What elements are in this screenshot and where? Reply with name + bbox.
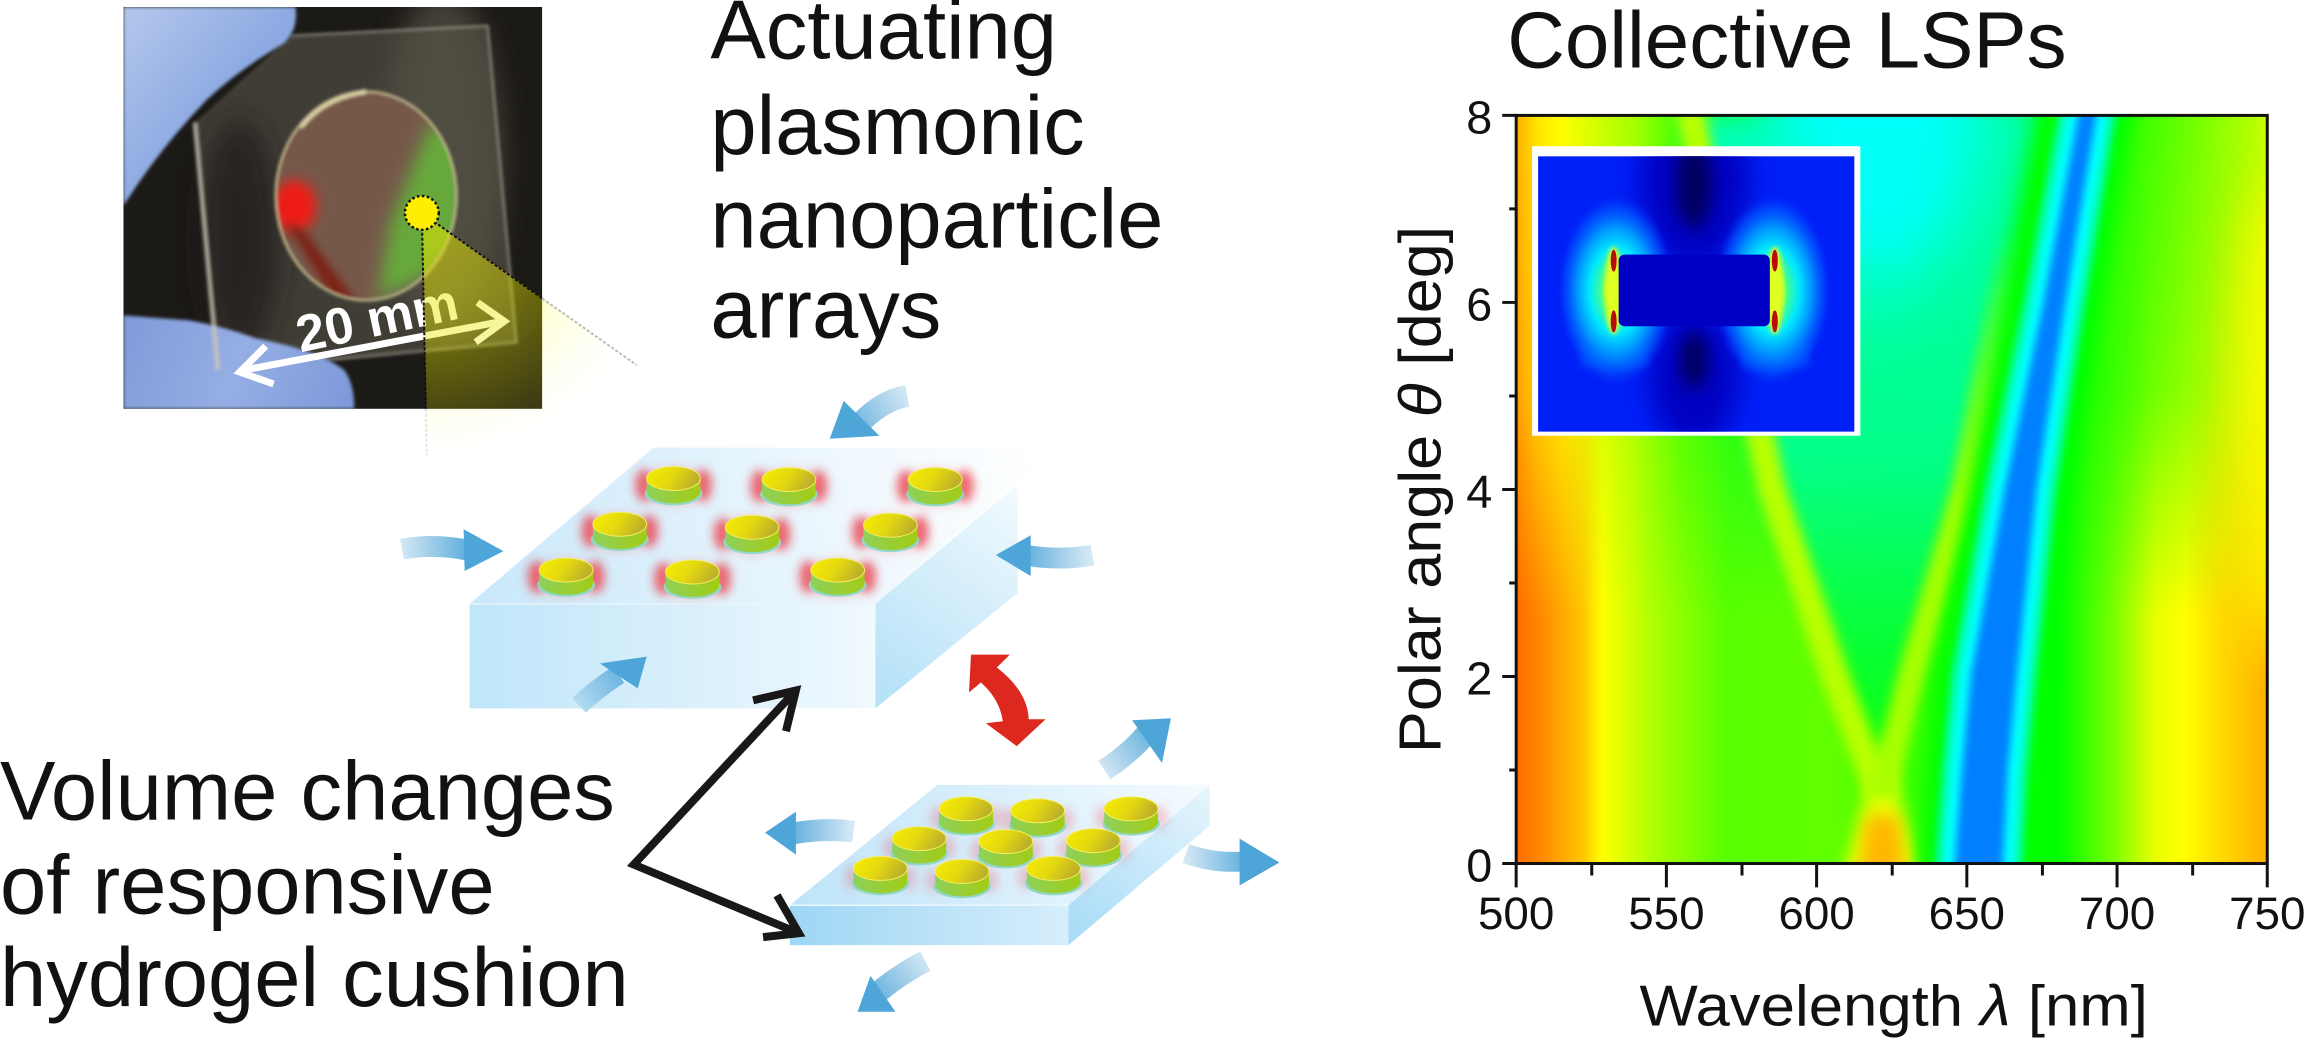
glass slide [195,0,516,370]
blue compress arrow: back [830,396,907,439]
x-axis tick labels: 500 [1478,888,1554,939]
blue compress arrow: right [996,535,1092,576]
cone dotted edges [422,213,637,456]
glass slide left edge [195,122,218,370]
upper glove finger [123,7,296,206]
x-axis tick labels: 700 [2079,888,2155,939]
V left arm [1687,99,1880,796]
black pointer arrows [634,690,799,937]
scale arrow and label: 20 mm [291,272,463,363]
y-axis title: Polar angle θ [deg] [1387,226,1454,753]
x-axis tick labels: 750 [2229,888,2305,939]
heading: volume changes of responsive hydrogel cushion: Volume changes [0,745,615,838]
y-axis tick labels: 8 [1466,91,1492,143]
yellow and orange patch at V apex [1842,736,1920,875]
blue compress arrow: left [402,529,503,571]
red double-headed arrow [969,655,1046,746]
heading: volume changes of responsive hydrogel cushion: of responsive [0,838,495,931]
y-axis tick labels: 6 [1466,278,1492,330]
x-axis tick labels: 550 [1628,888,1705,939]
cyan upper region [1738,116,2002,343]
lower glove fingers [123,315,354,409]
x-axis tick labels: 600 [1778,888,1855,939]
yellow zoom cone inside photo [422,224,542,409]
field hot spots [1611,250,1778,332]
yellow probe spot [405,196,439,230]
yellow mid right edge [2204,175,2266,666]
title: actuating plasmonic nanoparticle arrays: nanoparticle [710,173,1163,266]
heading: volume changes of responsive hydrogel cushion [0,745,629,1024]
x-axis title: Wavelength λ [nm] [1640,975,2148,1039]
blue compress arrow: front [579,657,647,705]
title: actuating plasmonic nanoparticle arrays: plasmonic [710,79,1085,172]
blue expand arrow: front [858,961,925,1012]
collapsed hydrogel block with arrays [790,785,1210,945]
hydrogel disc with diffraction colours [273,92,468,318]
blue expand arrow: back [1104,718,1171,770]
closely spaced nanoparticles [845,797,1167,898]
swollen hydrogel block with arrays [470,448,1057,708]
V interior [1687,99,2039,776]
dispersive collective resonance band [1954,86,2101,895]
title: actuating plasmonic nanoparticle arrays [710,0,1163,355]
blue expand arrow: left [765,812,854,855]
plot frame and ticks [1502,115,2267,887]
V right arm [1872,244,2016,803]
heat map: polar angle vs wavelength [1518,116,2266,862]
heading: volume changes of responsive hydrogel cushion: hydrogel cushion [0,931,629,1024]
y-axis tick labels: 2 [1466,652,1492,704]
y-axis tick labels: 4 [1466,465,1492,517]
nanoparticles with red plasmonic near field [528,467,973,600]
x-axis tick labels [1478,888,2305,939]
title: actuating plasmonic nanoparticle arrays: arrays [710,262,941,355]
scale arrow and label [234,293,510,388]
y-axis tick labels: 0 [1466,839,1492,891]
blue expand arrow: right [1186,839,1279,885]
x-axis tick labels: 650 [1929,888,2005,939]
y-axis tick labels [1466,91,1492,891]
yellow zoom cone outside photo [422,213,642,460]
photo of glass sample held by gloved fingers [123,7,542,409]
inset: near-field distribution map [1532,146,1860,436]
